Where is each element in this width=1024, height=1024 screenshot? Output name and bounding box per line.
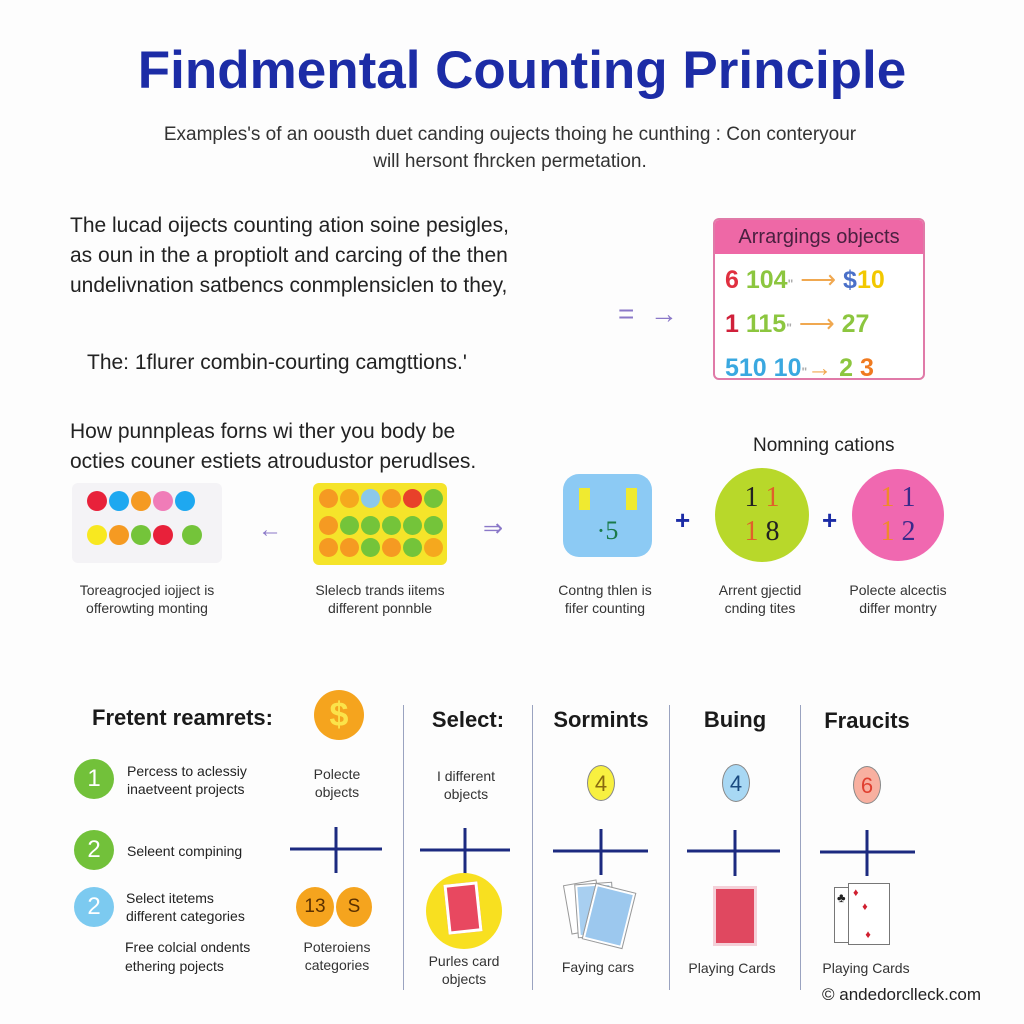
footer credit: © andedorclleck.com xyxy=(822,985,981,1004)
how paragraph: octies couner estiets atroudustor perudlses. xyxy=(70,450,476,473)
text: categories xyxy=(305,957,369,973)
column headings: Select: xyxy=(432,707,504,732)
intro paragraph: The lucad oijects counting ation soine pesigles, xyxy=(70,214,509,237)
step 1: inaetveent projects xyxy=(127,781,245,797)
icon: pink circle xyxy=(852,469,944,561)
intro paragraph xyxy=(70,214,509,297)
step 2: Seleent compining xyxy=(127,843,242,859)
step 2 xyxy=(74,830,242,870)
subtitle xyxy=(164,124,856,172)
crosses xyxy=(290,827,915,876)
number rows xyxy=(725,266,885,380)
step 3: Free colcial ondents xyxy=(125,939,250,955)
icon: two playing cards: ♦ xyxy=(853,887,859,899)
row 1 column texts and tokens: Polecte xyxy=(314,766,360,782)
panel: arranging objects xyxy=(713,218,925,380)
icon: green circle xyxy=(715,468,809,562)
captions row: Toreagrocjed iojject is offerowting monting xyxy=(80,582,214,616)
text: Fraucits xyxy=(824,708,910,733)
step 3: different categories xyxy=(126,908,245,924)
text: Poteroiens xyxy=(304,939,370,955)
icon: green circle: 1 8 xyxy=(744,516,780,547)
captions row xyxy=(80,582,947,616)
icon: two playing cards: ♣ xyxy=(837,890,846,905)
plus: + xyxy=(675,505,690,535)
icon: fan of blue cards xyxy=(563,879,636,950)
token 6 red xyxy=(853,766,881,804)
title: Findmental Counting Principle xyxy=(138,41,906,100)
icon: two playing cards: ♦ xyxy=(865,929,871,941)
text: Playing Cards xyxy=(822,960,910,976)
text: Purles card xyxy=(429,953,499,969)
icon: two playing cards xyxy=(834,883,890,945)
arrow: double right: ⇒ xyxy=(483,515,503,542)
token 4 blue xyxy=(722,764,750,802)
panel: dots grid 1 xyxy=(72,483,222,563)
text: Playing Cards xyxy=(688,960,776,976)
text: objects xyxy=(444,786,488,802)
text: I different xyxy=(437,768,495,784)
icon: blue square xyxy=(563,474,652,557)
token 4 yellow xyxy=(587,765,615,801)
heading: fretent reamrets: Fretent reamrets: xyxy=(92,705,273,730)
subheading text: The: 1flurer combin-courting camgttions.' xyxy=(87,351,467,374)
icon: two playing cards: ♦ xyxy=(862,901,868,913)
step 3: 2 xyxy=(87,893,101,920)
step 1 xyxy=(74,759,247,799)
icon: dollar coin xyxy=(314,690,364,740)
token 4 blue: 4 xyxy=(730,771,742,796)
text: Faying cars xyxy=(562,959,634,975)
captions row: Arrent gjectid cnding tites xyxy=(719,582,801,616)
captions row: Polecte alcectis differ montry xyxy=(849,582,947,616)
text: objects xyxy=(442,971,486,987)
dividers xyxy=(403,705,404,990)
icon: green circle: 1 1 xyxy=(744,482,780,513)
icon: yellow circle with card xyxy=(426,873,502,949)
icon: pink circle: 1 2 xyxy=(880,516,916,547)
icon: pink circle: 1 1 xyxy=(880,482,916,513)
intro paragraph: undelivnation satbencs conmplensiclen to they, xyxy=(70,274,507,297)
plus: + xyxy=(822,505,837,535)
intro paragraph: as oun in the a proptiolt and carcing of the then xyxy=(70,244,508,267)
panel: dots grid 2 xyxy=(313,483,447,565)
token 4 yellow: 4 xyxy=(595,771,607,796)
subtitle: will hersont fhrcken permetation. xyxy=(373,151,647,172)
step 3 xyxy=(74,887,250,974)
header: Arrargings objects xyxy=(738,226,900,248)
text: Sormints xyxy=(553,707,649,732)
number rows: 1 115" ⟶ 27 xyxy=(725,310,869,338)
icon: blue square: ·5 xyxy=(597,516,618,545)
row 1 column texts and tokens: objects xyxy=(315,784,359,800)
arrow: equals to box: = → xyxy=(618,298,678,329)
icon: red card xyxy=(713,886,757,946)
arrow: left: ← xyxy=(258,516,282,543)
captions row: Contng thlen is fifer counting xyxy=(558,582,652,616)
step 1: 1 xyxy=(87,765,101,792)
step 1: Percess to aclessiy xyxy=(127,763,247,779)
how paragraph: How punnpleas forns wi ther you body be xyxy=(70,420,455,443)
captions row: Slelecb trands iitems different ponnble xyxy=(315,582,445,616)
subtitle: Examples's of an oousth duet canding oujects thoing he cunthing : Con conteryour xyxy=(164,124,856,145)
token 6 red: 6 xyxy=(861,773,873,798)
label: nomning cations: Nomning cations xyxy=(753,435,895,456)
header xyxy=(715,220,923,254)
step 3: ethering pojects xyxy=(125,958,224,974)
coins 13 S: 13 xyxy=(304,896,326,917)
number rows: 6 104" ⟶ $10 xyxy=(725,266,885,294)
step 3: Select itetems xyxy=(126,890,214,906)
step 2: 2 xyxy=(87,836,101,863)
text: Buing xyxy=(704,707,766,732)
coins 13 S xyxy=(296,887,372,927)
how paragraph xyxy=(70,420,476,473)
coins 13 S: S xyxy=(348,896,360,917)
row 1 column texts and tokens xyxy=(314,766,360,800)
icon: dollar coin: $ xyxy=(330,696,348,734)
